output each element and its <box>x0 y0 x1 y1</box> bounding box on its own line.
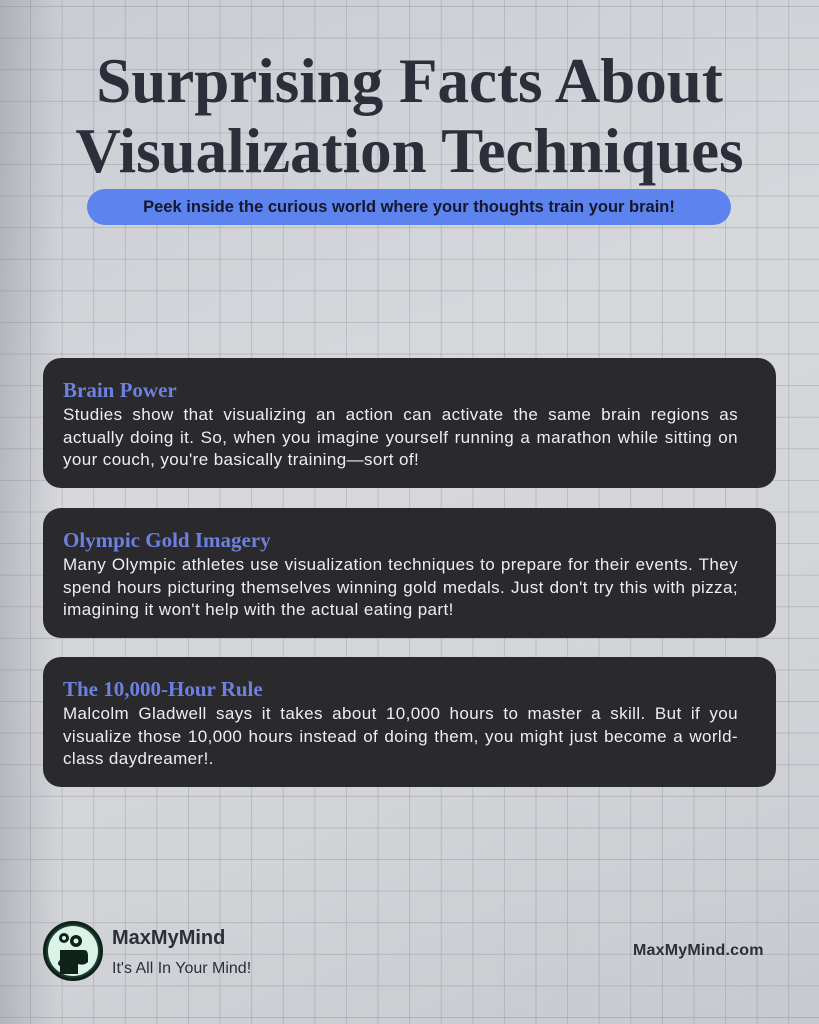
website url: MaxMyMind.com <box>633 942 764 959</box>
heading: olympic gold: Olympic Gold Imagery <box>63 528 271 552</box>
text: olympic gold: spend hours picturing themselves winning gold medals. Just don't try this with pizza; <box>63 578 738 596</box>
subtitle pill: Peek inside the curious world where your thoughts train your brain! <box>143 198 675 216</box>
heading: brain power: Brain Power <box>63 378 177 402</box>
text: 10000 hour rule: class daydreamer!. <box>63 749 214 768</box>
heading: 10000 hour rule: The 10,000-Hour Rule <box>63 677 263 701</box>
panel: olympic gold <box>43 508 776 638</box>
title: Visualization Techniques <box>75 116 744 186</box>
text: brain power: actually doing it. So, when you imagine yourself running a marathon while sitting on <box>63 428 738 446</box>
panel: brain power <box>43 358 776 488</box>
text: olympic gold: Many Olympic athletes use visualization techniques to prepare for their events. They <box>63 555 738 574</box>
subtitle pill <box>87 189 731 225</box>
text: olympic gold: imagining it won't help with the actual eating part! <box>63 600 454 619</box>
tagline: It's All In Your Mind! <box>112 960 251 977</box>
icon: logo head with gears <box>43 921 103 981</box>
text: olympic gold <box>63 555 738 619</box>
brand name: MaxMyMind <box>112 927 225 949</box>
text: 10000 hour rule <box>63 704 738 768</box>
text: brain power <box>63 405 738 469</box>
text: brain power: Studies show that visualizing an action can activate the same brain regions as <box>63 405 738 424</box>
text: 10000 hour rule: Malcolm Gladwell says it takes about 10,000 hours to master a skill. But if you <box>63 704 738 723</box>
text: 10000 hour rule: visualize those 10,000 hours instead of doing them, you might just become a world- <box>63 726 738 746</box>
title <box>75 46 744 186</box>
panel: 10000 hour rule <box>43 657 776 787</box>
title: Surprising Facts About <box>96 46 723 116</box>
text: brain power: your couch, you're basically training—sort of! <box>63 450 419 469</box>
